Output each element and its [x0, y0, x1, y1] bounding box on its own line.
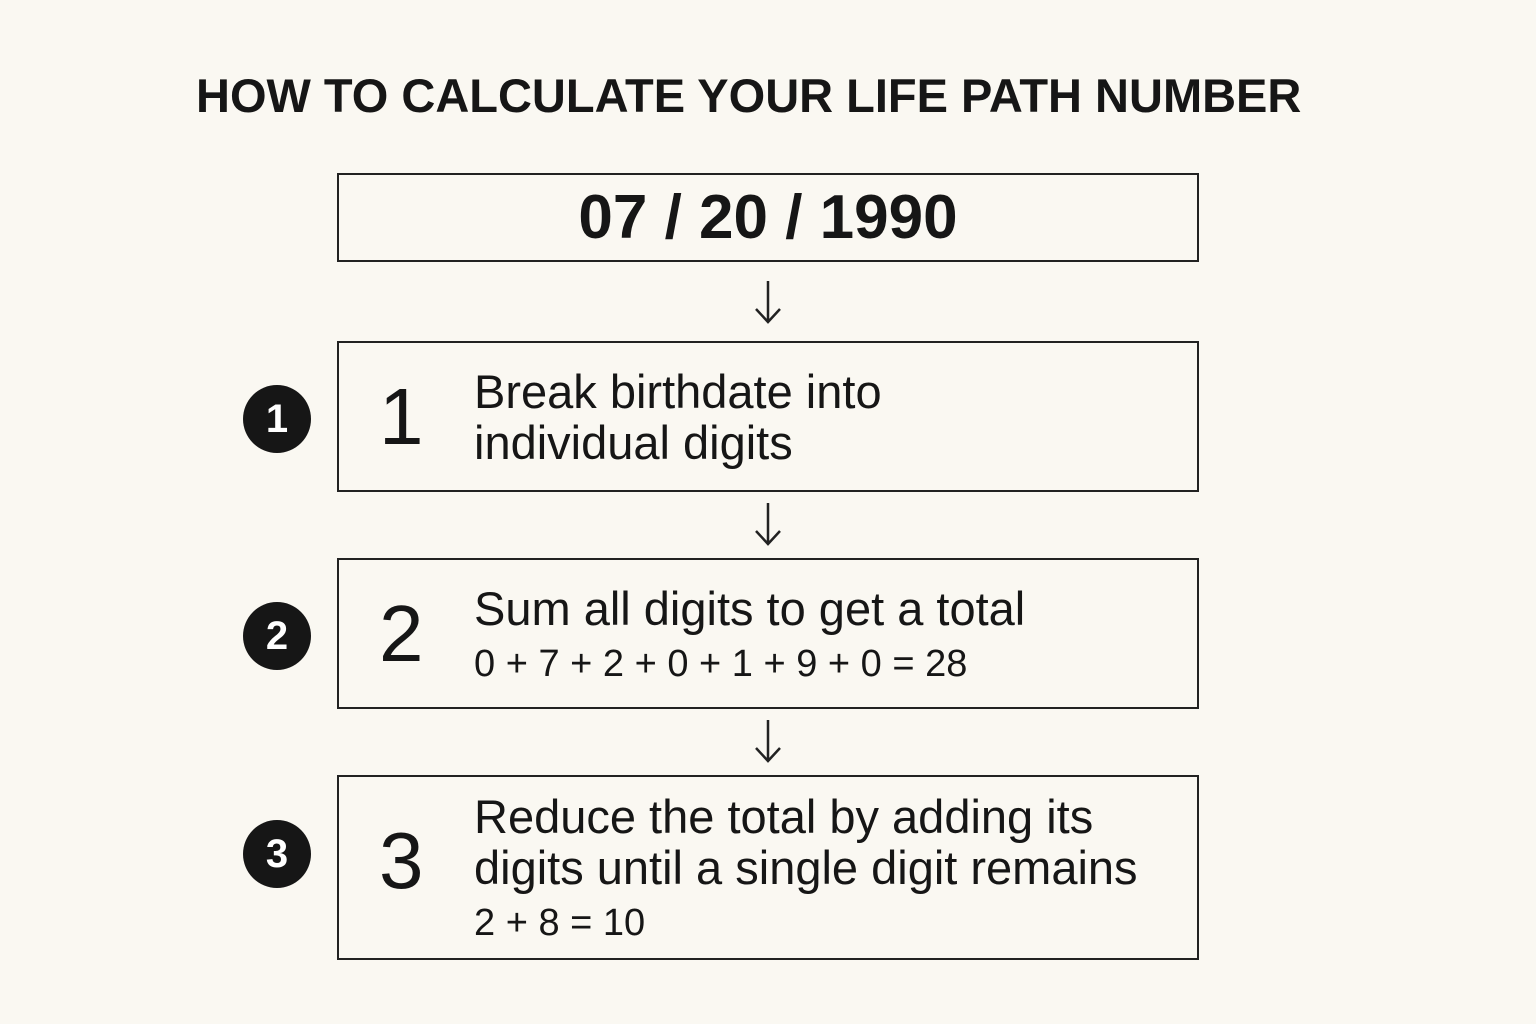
date box	[337, 173, 1199, 262]
step 2 box: 0 + 7 + 2 + 0 + 1 + 9 + 0 = 28	[474, 643, 967, 685]
step 1 box: 1	[379, 372, 424, 461]
step 2 badge: 2	[266, 614, 288, 658]
step 2 box: 2	[379, 589, 424, 678]
arrow	[755, 720, 781, 763]
title: HOW TO CALCULATE YOUR LIFE PATH NUMBER	[196, 69, 1301, 122]
step 3 box: 2 + 8 = 10	[474, 902, 645, 944]
step 3 box: Reduce the total by adding its	[474, 790, 1093, 843]
step 1 box: individual digits	[474, 416, 793, 469]
step 1 box	[337, 341, 1199, 492]
step 3 badge	[243, 820, 311, 888]
step 3 box: 3	[379, 816, 424, 905]
step 3 box	[337, 775, 1199, 960]
arrow	[755, 503, 781, 546]
step 1 badge: 1	[266, 397, 288, 441]
arrow	[755, 281, 781, 324]
step 3 box: digits until a single digit remains	[474, 841, 1138, 894]
step 3 badge: 3	[266, 832, 288, 876]
step 1 box: Break birthdate into	[474, 365, 882, 418]
date box: 07 / 20 / 1990	[578, 183, 958, 252]
step 1 badge	[243, 385, 311, 453]
step 2 box: Sum all digits to get a total	[474, 582, 1025, 635]
step 2 box	[337, 558, 1199, 709]
step 2 badge	[243, 602, 311, 670]
